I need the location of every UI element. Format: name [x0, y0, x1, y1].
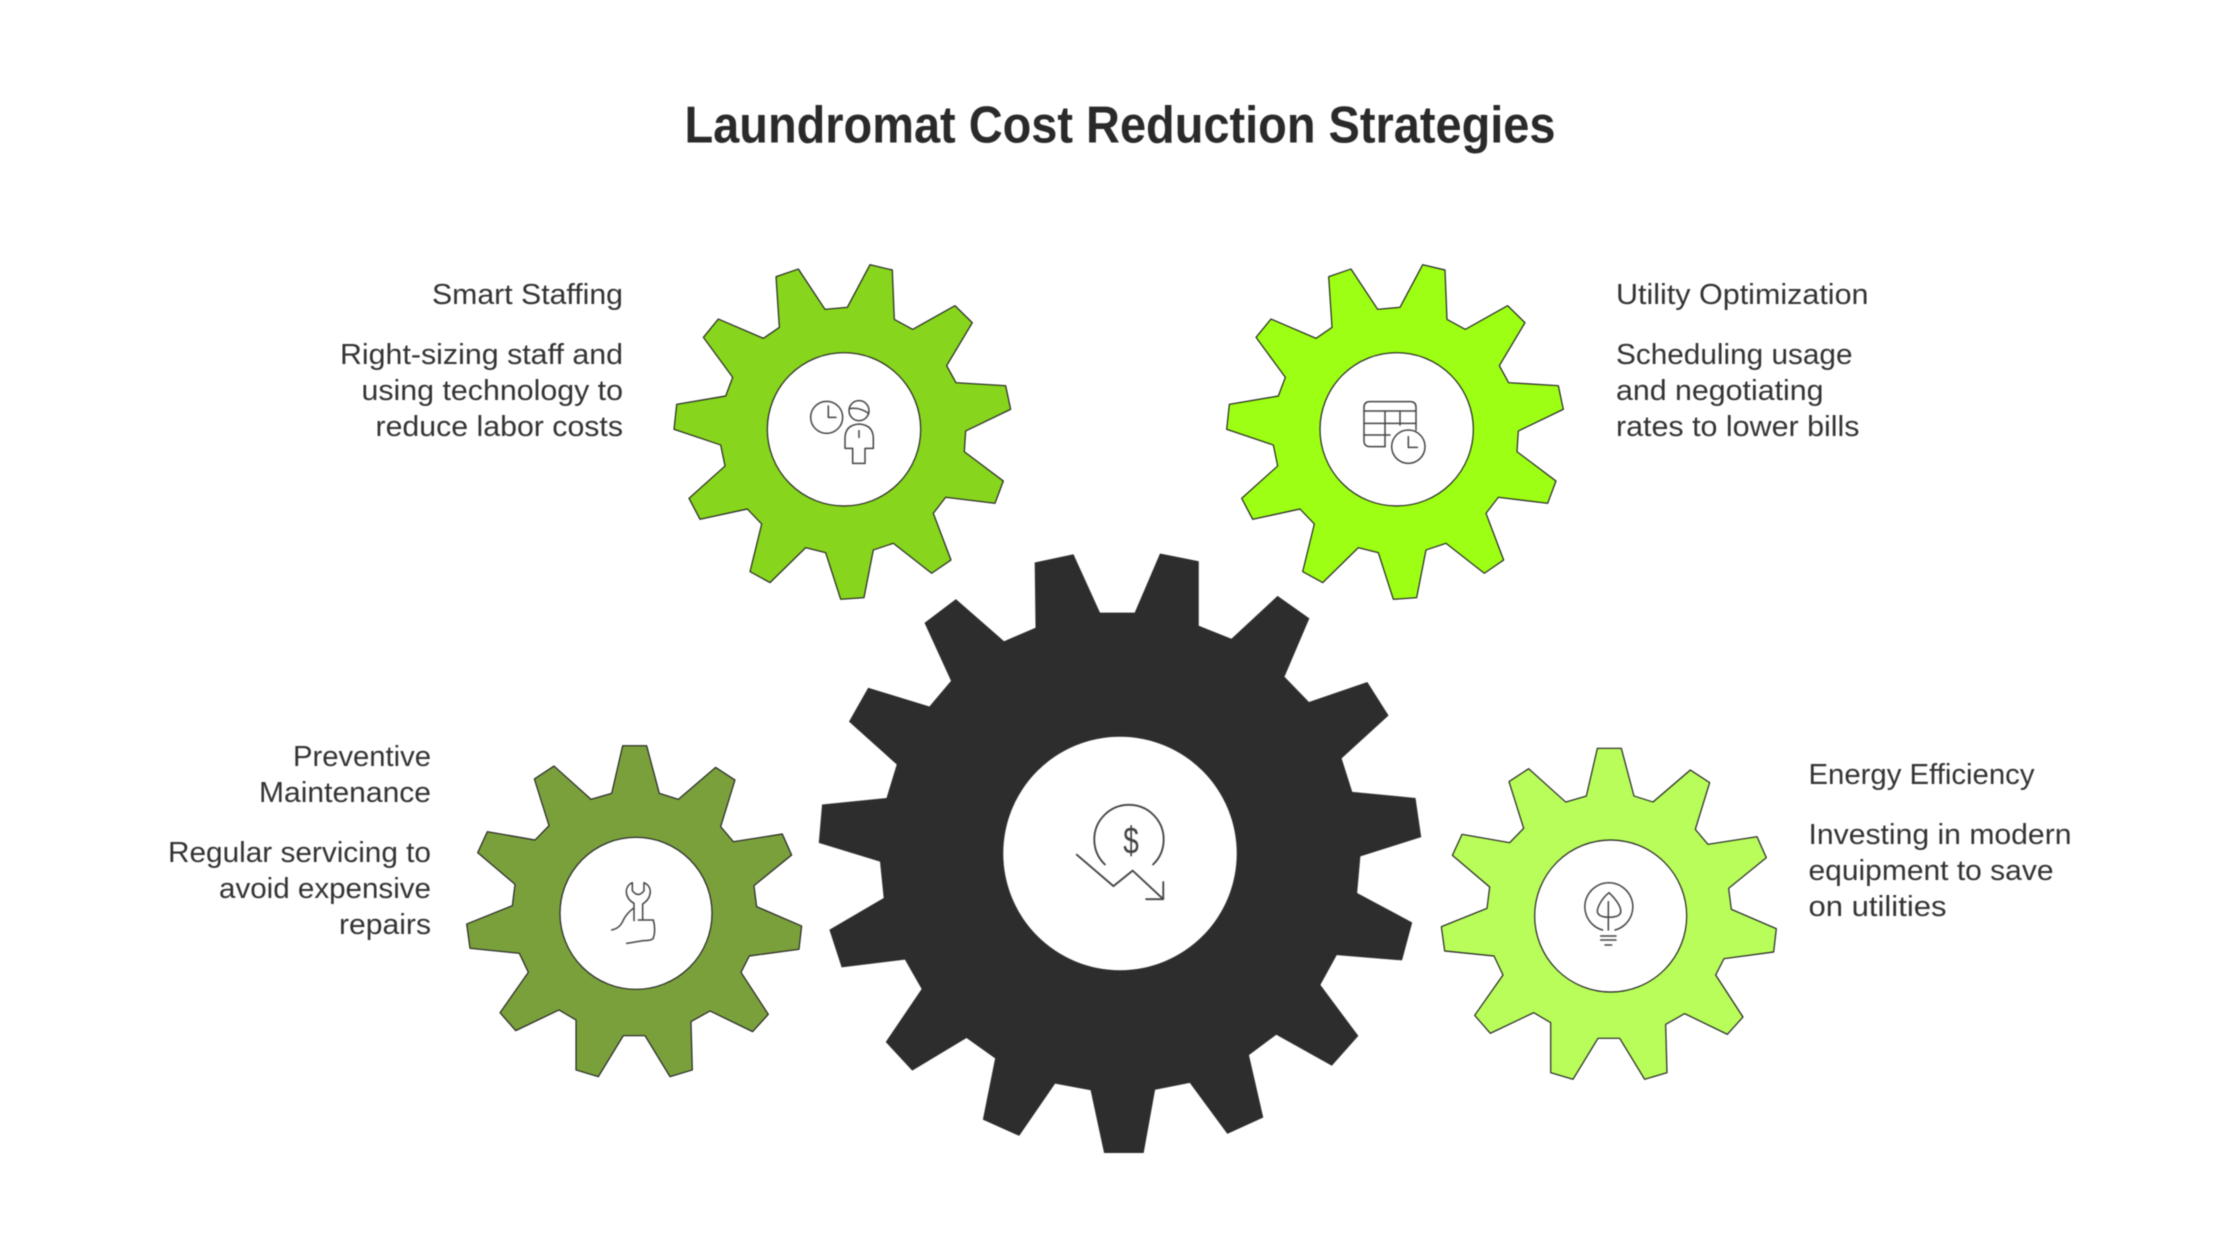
heading: utility optimization: Utility Optimization	[1616, 279, 1868, 311]
description: preventive maintenance: repairs	[339, 909, 431, 941]
text block: preventive maintenance	[168, 741, 431, 941]
energy efficiency gear hole	[1535, 840, 1687, 992]
heading: preventive maintenance: Maintenance	[259, 777, 431, 809]
heading: preventive maintenance: Preventive	[293, 741, 431, 773]
heading: energy efficiency: Energy Efficiency	[1808, 759, 2035, 791]
text block: utility optimization	[1616, 279, 1868, 443]
preventive maintenance gear shape	[467, 746, 802, 1077]
description: smart staffing	[340, 339, 623, 443]
icon: clock and staff member	[811, 401, 873, 463]
description: preventive maintenance: Regular servicing to	[168, 837, 431, 869]
description: energy efficiency: on utilities	[1808, 891, 1946, 923]
text block: energy efficiency	[1808, 759, 2072, 923]
description: energy efficiency	[1808, 819, 2072, 923]
description: utility optimization	[1616, 339, 1860, 443]
smart staffing gear hole	[767, 353, 921, 506]
description: utility optimization: and negotiating	[1616, 375, 1824, 407]
panel: utility optimization gear	[1227, 265, 1563, 599]
description: preventive maintenance	[168, 837, 431, 941]
description: utility optimization: rates to lower bills	[1616, 411, 1860, 443]
icon: falling dollar cost: $	[1123, 819, 1139, 861]
text block: smart staffing	[340, 279, 623, 443]
description: preventive maintenance: avoid expensive	[219, 873, 431, 905]
central gear hole	[1003, 737, 1237, 970]
description: energy efficiency: Investing in modern	[1808, 819, 2072, 851]
panel: energy efficiency gear	[1441, 748, 1776, 1079]
description: smart staffing: using technology to	[362, 375, 623, 407]
central gear shape	[819, 553, 1421, 1153]
icon: falling dollar cost	[1077, 805, 1164, 899]
icon: schedule table and clock	[1364, 402, 1425, 463]
description: utility optimization: Scheduling usage	[1616, 339, 1852, 371]
energy efficiency gear shape	[1441, 748, 1776, 1079]
heading: smart staffing: Smart Staffing	[432, 279, 623, 311]
panel: smart staffing gear	[674, 265, 1011, 599]
icon: hand holding wrench	[612, 883, 655, 943]
description: smart staffing: Right-sizing staff and	[340, 339, 623, 371]
preventive maintenance gear hole	[560, 837, 712, 989]
panel: central gear	[819, 553, 1421, 1153]
utility optimization gear hole	[1320, 353, 1473, 506]
title: Laundromat Cost Reduction Strategies	[684, 96, 1556, 154]
description: energy efficiency: equipment to save	[1808, 855, 2054, 887]
description: smart staffing: reduce labor costs	[376, 411, 623, 443]
panel: preventive maintenance gear	[467, 746, 802, 1077]
heading: preventive maintenance	[259, 741, 431, 809]
utility optimization gear shape	[1227, 265, 1563, 599]
icon: leaf light bulb	[1585, 883, 1633, 945]
smart staffing gear shape	[674, 265, 1011, 599]
